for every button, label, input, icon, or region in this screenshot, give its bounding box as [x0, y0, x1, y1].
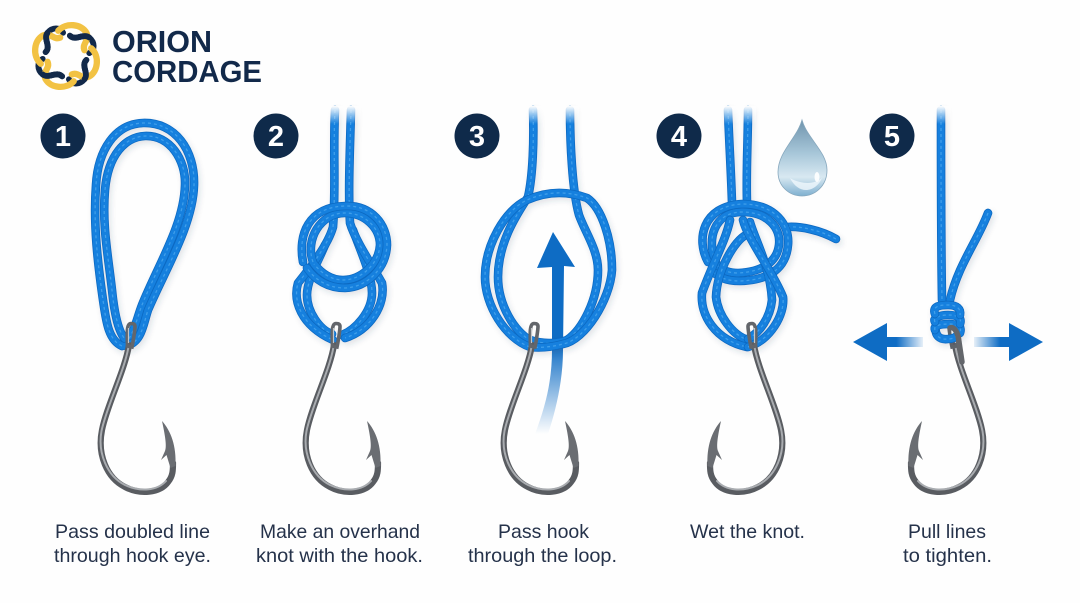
- caption: knot with the hook.: [256, 545, 423, 567]
- logo: [35, 24, 262, 89]
- caption: Pull lines: [908, 521, 986, 543]
- caption: Wet the knot.: [690, 521, 805, 543]
- badge: number 1: 1: [55, 121, 71, 153]
- caption: [256, 521, 423, 567]
- doubled rope loop: [95, 123, 194, 346]
- caption: [54, 521, 211, 567]
- panel: step 4: [656, 106, 836, 543]
- badge: number 2: [254, 114, 298, 158]
- icon: fish hook: [101, 324, 176, 492]
- badge: number 5: 5: [884, 121, 900, 153]
- icon: water drop: [778, 120, 827, 196]
- panel: step 5: [853, 106, 1043, 567]
- icon: fish hook: [306, 324, 381, 492]
- badge: number 4: [656, 114, 702, 158]
- caption: Pass doubled line: [55, 521, 210, 543]
- overhand knot rope: [297, 110, 387, 340]
- hook eye over knot: [950, 328, 962, 362]
- badge: number 3: 3: [469, 121, 485, 153]
- badge: number 2: 2: [268, 121, 284, 153]
- panel: step 3: [454, 106, 617, 567]
- brand name: ORION: [112, 24, 212, 59]
- caption: to tighten.: [903, 545, 992, 567]
- badge: number 5: [870, 114, 914, 158]
- badge: number 3: [454, 114, 500, 158]
- caption: through the loop.: [468, 545, 617, 567]
- rope loop: [485, 110, 612, 347]
- icon: interlaced rope ring logo mark: [35, 25, 97, 87]
- caption: Make an overhand: [260, 521, 420, 543]
- icon: fish hook: [707, 324, 782, 492]
- icon: fish hook: [504, 324, 579, 492]
- badge: number 4: 4: [671, 121, 687, 153]
- panel: step 1: [40, 114, 211, 567]
- caption: [903, 521, 992, 567]
- arrow: pull right: [974, 323, 1043, 361]
- wet knot rope: [702, 110, 836, 347]
- tightened knot rope: [934, 110, 988, 339]
- arrow: pull left: [853, 323, 923, 361]
- brand name: CORDAGE: [112, 54, 262, 89]
- caption: Pass hook: [498, 521, 589, 543]
- arrow: up through the loop: [535, 232, 575, 434]
- brand name: [112, 24, 262, 89]
- caption: through hook eye.: [54, 545, 211, 567]
- badge: number 1: [40, 114, 86, 158]
- panel: step 2: [254, 106, 423, 567]
- caption: [468, 521, 617, 567]
- icon: fish hook: [908, 324, 983, 492]
